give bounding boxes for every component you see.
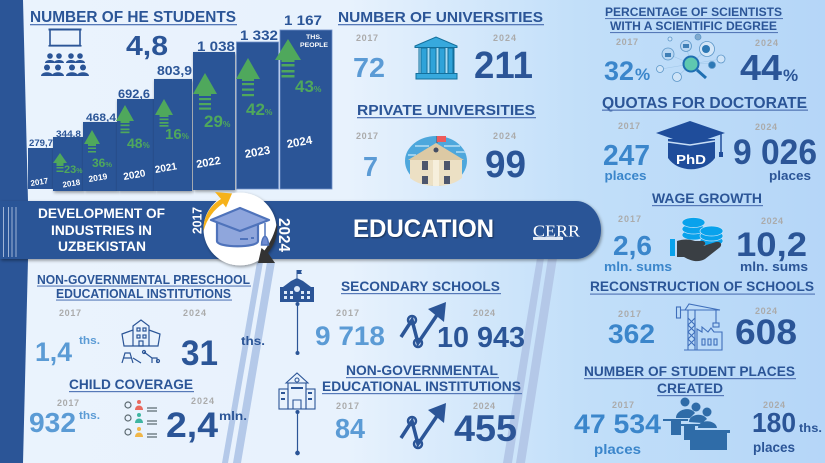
- panel: private universities: 2017: [356, 131, 378, 141]
- heading: RECONSTRUCTION OF SCHOOLS: [590, 278, 814, 294]
- panel: percentage of scientists: %: [635, 65, 650, 84]
- icon: preschool with playground: [122, 320, 160, 363]
- heading: PERCENTAGE OF SCIENTISTS: [605, 5, 782, 19]
- panel: child coverage: 2024: [191, 396, 214, 406]
- panel: non-governmental preschool institutions: 1,4: [35, 337, 72, 367]
- bar chart: 2024: [286, 135, 314, 151]
- panel: number of student places created: ths.: [799, 421, 822, 435]
- panel: wage growth: 10,2: [736, 226, 807, 264]
- panel: non-governmental preschool institutions: ths.: [241, 336, 265, 348]
- panel: non-governmental preschool institutions: ths.: [79, 335, 100, 347]
- heading: [37, 273, 251, 301]
- panel: child coverage: 2,4: [166, 406, 219, 445]
- panel: percentage of scientists: 2017: [616, 37, 638, 47]
- panel: number of universities: 72: [353, 52, 385, 83]
- panel: percentage of scientists: 32: [604, 56, 634, 86]
- panel: private universities: 2024: [493, 131, 516, 141]
- panel: number of universities: 211: [474, 45, 533, 87]
- panel: quotas for doctorate: 247: [603, 140, 650, 172]
- bar chart: 2023: [244, 145, 271, 161]
- icon: growth arrow: [401, 302, 446, 347]
- panel: number of universities: 2017: [356, 33, 378, 43]
- panel: wage growth: mln. sums: [604, 259, 672, 274]
- panel: secondary schools: 2024: [473, 308, 495, 318]
- heading: NUMBER OF UNIVERSITIES: [338, 9, 543, 26]
- heading: NON-GOVERNMENTAL: [346, 362, 498, 378]
- logo: CERR: CERR: [533, 222, 581, 240]
- icon: research magnifier: [656, 34, 725, 82]
- panel: quotas for doctorate: 9 026: [733, 133, 817, 172]
- icon: coins in hand: [670, 218, 723, 261]
- banner subtitle: DEVELOPMENT OF: [38, 206, 165, 221]
- bar chart: 1 167: [284, 13, 322, 28]
- bar chart: 344,8: [56, 129, 81, 140]
- bar chart: 16%: [165, 126, 189, 143]
- panel: percentage of scientists: 44: [740, 47, 782, 88]
- bar chart: 23%: [64, 164, 83, 176]
- heading: number of HE students: NUMBER OF HE STUDENTS: [30, 9, 236, 26]
- panel: reconstruction of schools: 362: [608, 319, 655, 349]
- emblem: graduation cap with years: 2017: [190, 207, 204, 234]
- panel: private universities: 99: [485, 144, 526, 186]
- heading: [584, 364, 796, 396]
- panel: quotas for doctorate: 2024: [755, 122, 777, 132]
- panel: quotas for doctorate: places: [769, 168, 811, 183]
- bar chart: 42%: [246, 100, 273, 119]
- main title: education: EDUCATION: [353, 215, 494, 243]
- heading: NUMBER OF STUDENT PLACES: [584, 364, 795, 379]
- panel: reconstruction of schools: 2024: [755, 306, 777, 316]
- banner subtitle: UZBEKISTAN: [58, 239, 146, 254]
- panel: wage growth: 2024: [761, 216, 783, 226]
- panel: percentage of scientists: 2024: [755, 38, 778, 48]
- panel: wage growth: [604, 190, 808, 274]
- heading: EDUCATIONAL INSTITUTIONS: [322, 378, 521, 394]
- panel: non-governmental educational institutions: 2017: [336, 401, 359, 411]
- panel: secondary schools: [280, 270, 525, 355]
- heading: [322, 362, 522, 394]
- banner subtitle: INDUSTRIES IN: [51, 223, 152, 238]
- panel: secondary schools: 9 718: [315, 321, 385, 351]
- panel: wage growth: 2017: [618, 214, 641, 224]
- panel: non-governmental educational institutions: 84: [335, 413, 365, 444]
- banner subtitle: [38, 206, 165, 254]
- icon: PhD cap: [656, 121, 725, 169]
- heading: CREATED: [657, 381, 723, 396]
- heading: EDUCATIONAL INSTITUTIONS: [56, 287, 231, 301]
- panel: private universities: [356, 102, 536, 186]
- panel: quotas for doctorate: [602, 95, 817, 183]
- bar chart: PEOPLE: [300, 42, 329, 49]
- bar chart: 2017: [30, 176, 49, 188]
- emblem: graduation cap with years: [190, 192, 292, 266]
- bar chart: 43%: [295, 77, 322, 96]
- panel: non-governmental preschool institutions: 2024: [183, 308, 206, 318]
- bar chart: 2021: [154, 161, 178, 176]
- bar chart: 36%: [92, 156, 112, 170]
- bar chart: 468,4: [86, 112, 117, 124]
- emblem: graduation cap with years: 2024: [275, 218, 292, 252]
- panel: secondary schools: 10 943: [437, 322, 525, 354]
- panel: non-governmental preschool institutions: 31: [181, 334, 218, 373]
- panel: non-governmental preschool institutions: [35, 273, 265, 373]
- banner: [0, 201, 601, 259]
- panel: child coverage: ths.: [79, 410, 100, 422]
- bar chart: 1 332: [240, 28, 278, 43]
- panel: number of universities: 2024: [493, 33, 516, 43]
- panel: number of student places created: places: [753, 440, 795, 455]
- icon: growth arrow: [401, 403, 446, 448]
- heading: QUOTAS FOR DOCTORATE: [602, 95, 807, 112]
- heading: WAGE GROWTH: [652, 190, 762, 206]
- bar chart: 1 038: [197, 39, 236, 54]
- bar chart: 279,7: [29, 138, 53, 148]
- icon: university columns: [415, 37, 457, 79]
- panel: quotas for doctorate: places: [604, 168, 646, 183]
- bar chart: 2019: [88, 171, 108, 184]
- heading: CHILD COVERAGE: [69, 376, 193, 392]
- icon: PhD cap: PhD: [676, 152, 706, 167]
- icon: school with pin line: [280, 270, 314, 355]
- heading: RPIVATE UNIVERSITIES: [357, 102, 535, 119]
- bar chart: 29%: [204, 112, 231, 131]
- panel: non-governmental educational institutions: [279, 362, 522, 455]
- bar chart: 2022: [195, 155, 222, 171]
- heading: SECONDARY SCHOOLS: [341, 278, 500, 294]
- heading: [605, 5, 783, 33]
- heading: NON-GOVERNMENTAL PRESCHOOL: [37, 273, 250, 287]
- panel: non-governmental preschool institutions: 2017: [59, 308, 81, 318]
- panel: wage growth: 2,6: [613, 230, 652, 261]
- bar chart: 48%: [127, 135, 150, 151]
- panel: child coverage: [29, 376, 247, 445]
- bar chart: THS.: [306, 34, 322, 41]
- bar chart: [28, 13, 332, 191]
- panel: percentage of scientists: [604, 5, 798, 88]
- panel: number of universities: [338, 9, 544, 87]
- panel: wage growth: mln. sums: [740, 259, 808, 274]
- panel: percentage of scientists: %: [783, 66, 798, 85]
- icon: school outline with pin line: [279, 373, 315, 455]
- panel: number of student places created: 2024: [763, 400, 785, 410]
- icon: university building: [405, 136, 467, 186]
- panel: reconstruction of schools: 608: [735, 313, 797, 352]
- panel: non-governmental educational institutions: 455: [454, 408, 517, 449]
- panel: number of student places created: [574, 364, 822, 457]
- bar chart: 2018: [62, 178, 81, 189]
- panel: number of student places created: 2017: [612, 400, 634, 410]
- panel: number of student places created: 47 534: [574, 409, 661, 439]
- icon: students at desks: [663, 398, 730, 450]
- icon: checklist of children: [125, 400, 157, 437]
- panel: secondary schools: 2017: [336, 308, 359, 318]
- panel: child coverage: 932: [29, 407, 76, 438]
- icon: crane and factory: [676, 304, 722, 350]
- panel: child coverage: mln.: [219, 411, 247, 423]
- bar chart: 2020: [123, 168, 147, 183]
- heading: WITH A SCIENTIFIC DEGREE: [610, 19, 777, 33]
- panel: non-governmental educational institutions: 2024: [473, 401, 495, 411]
- bar chart: 803,9: [157, 64, 192, 78]
- panel: child coverage: 2017: [57, 398, 79, 408]
- panel: number of student places created: 180: [752, 407, 796, 438]
- panel: number of HE students: [28, 9, 332, 191]
- icon: classroom: [41, 28, 89, 76]
- panel: number of student places created: places: [594, 441, 641, 457]
- panel: reconstruction of schools: 2017: [618, 309, 641, 319]
- panel: quotas for doctorate: 2017: [618, 121, 640, 131]
- bar chart: 692,6: [118, 89, 150, 101]
- panel: reconstruction of schools: [590, 278, 815, 352]
- growth multiple: 4,8: [126, 30, 168, 61]
- panel: private universities: 7: [363, 151, 378, 182]
